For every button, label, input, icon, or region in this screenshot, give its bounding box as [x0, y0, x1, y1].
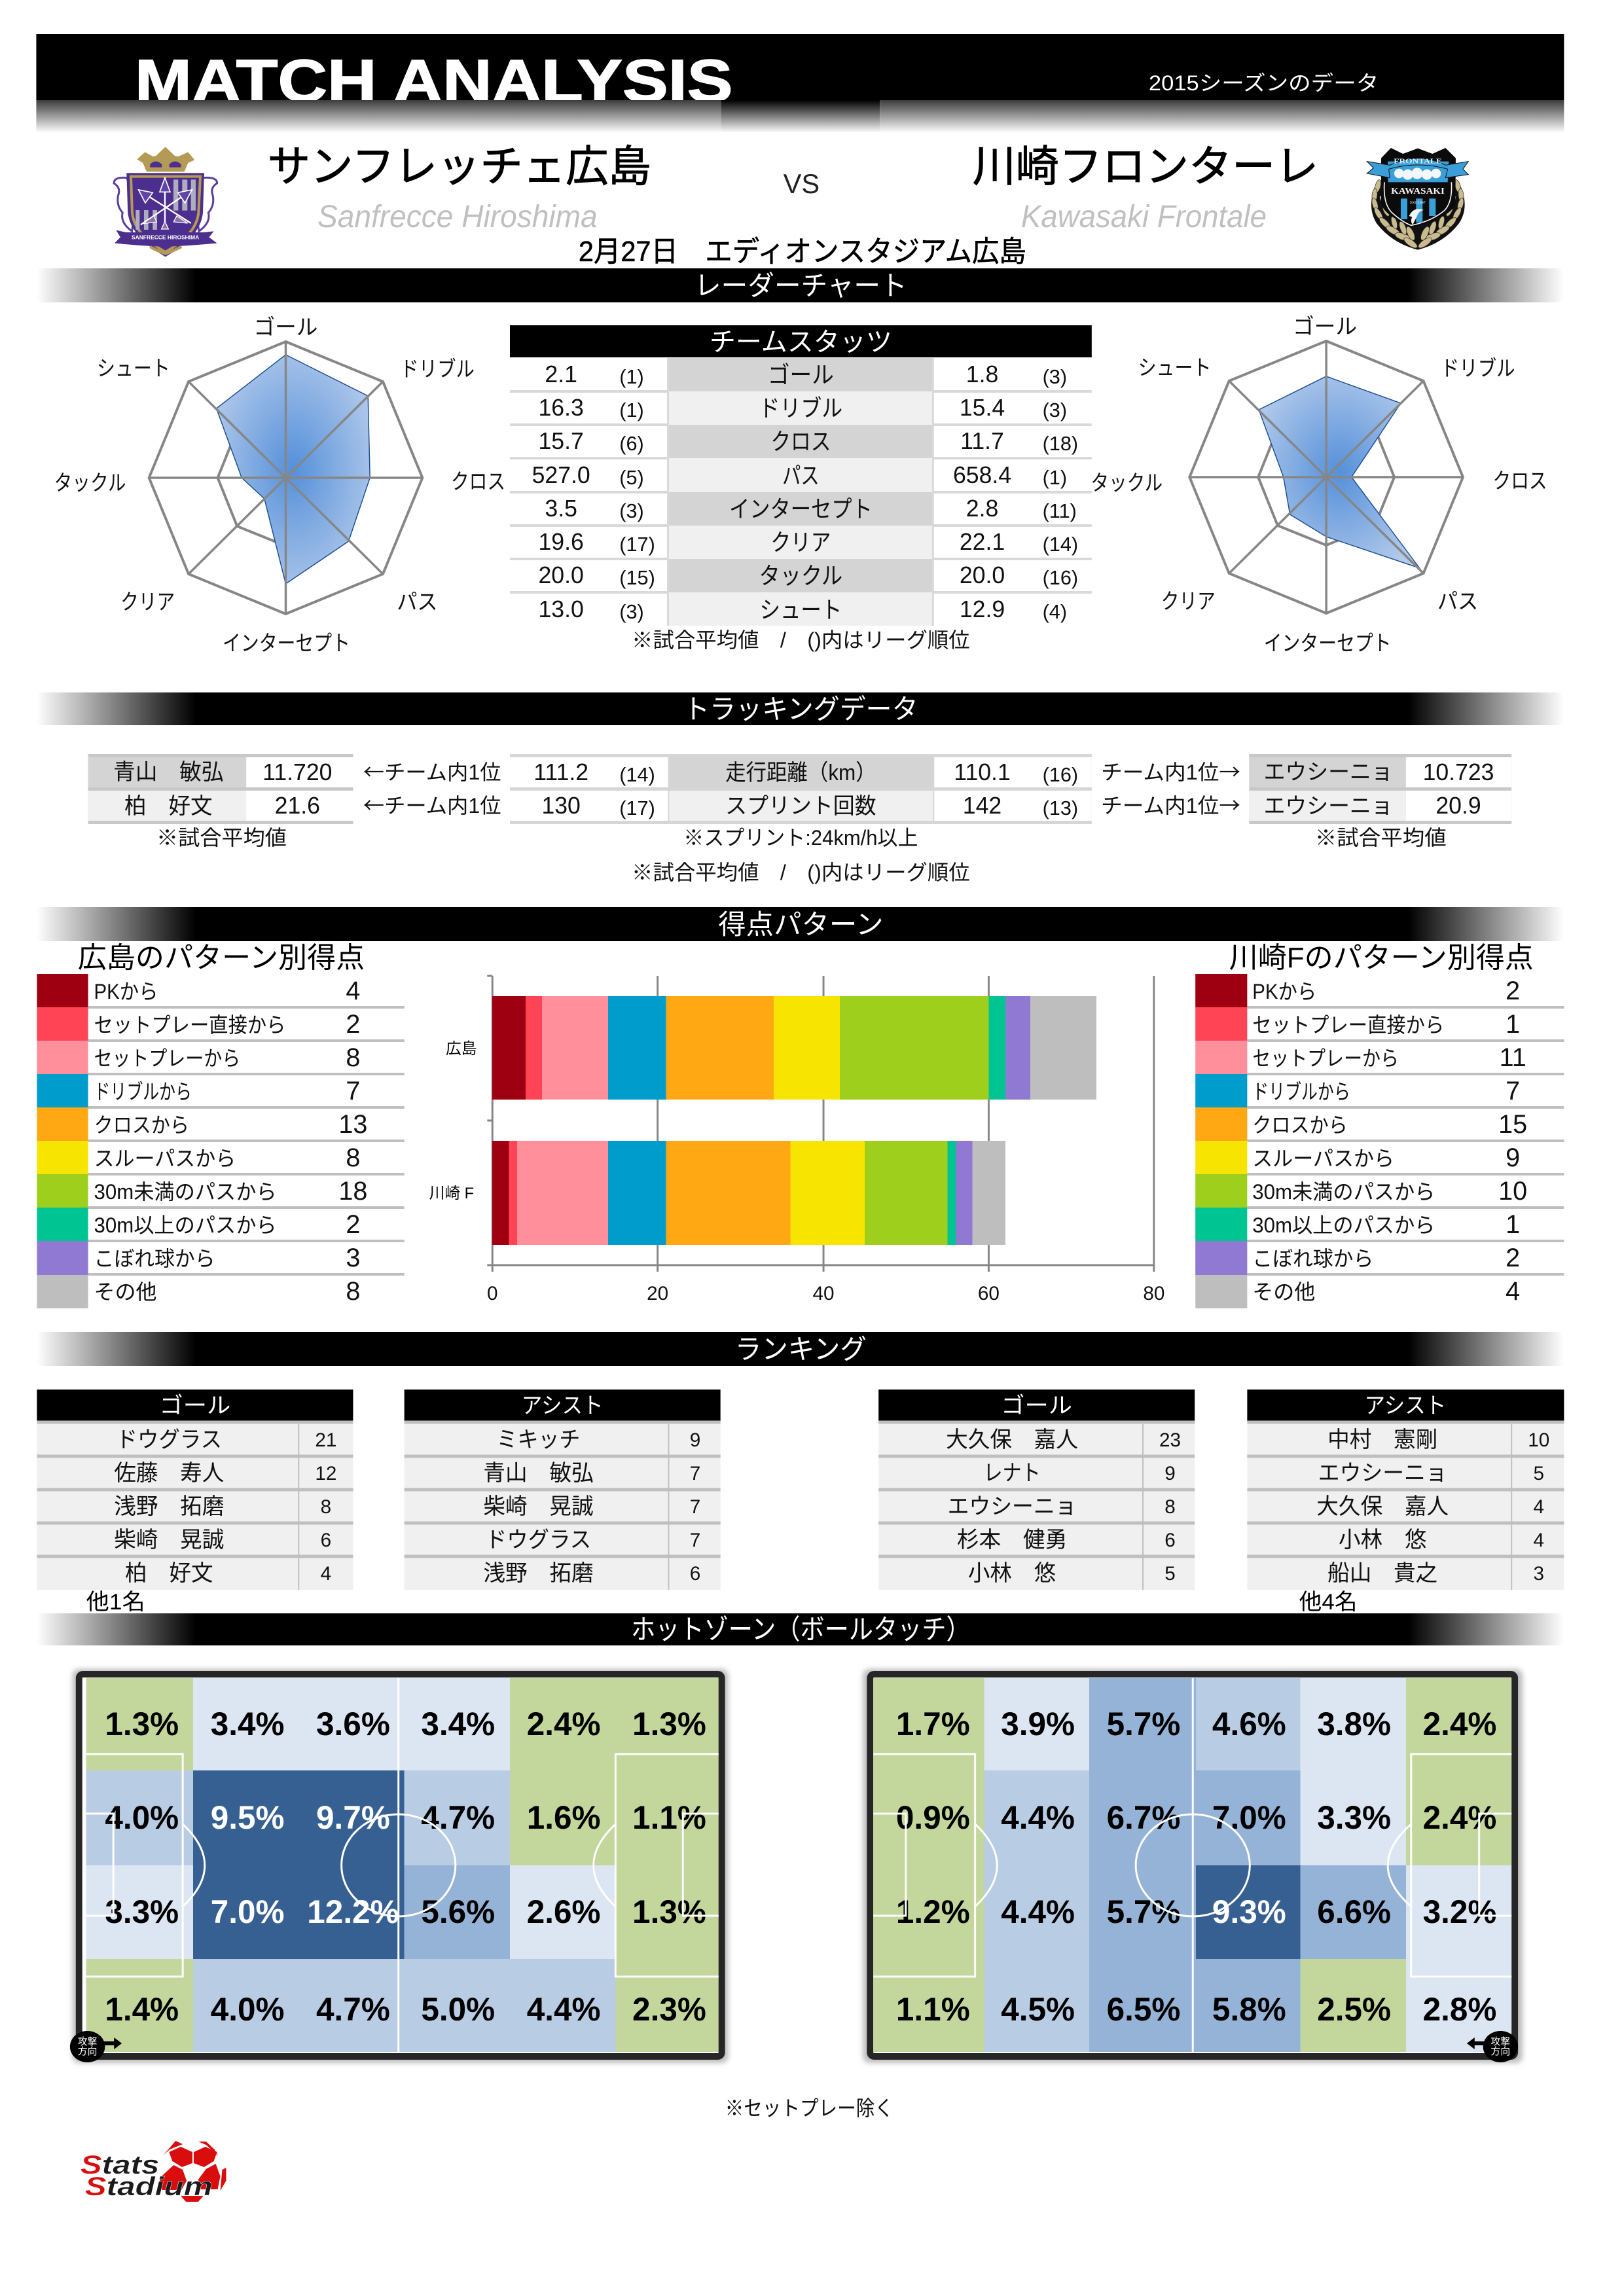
tracking: left arrows: ←チーム内1位 [363, 756, 501, 786]
stats rows: 20.0 [539, 562, 584, 588]
panel: Hiroshima scoring legend: セットプレーから [94, 1047, 240, 1070]
heat values: 5.0% [421, 1991, 495, 2028]
axis labels [54, 315, 505, 655]
data polygon [1259, 376, 1420, 568]
logo: Stats Stadium: Stats [81, 2151, 159, 2179]
panel: Kawasaki scoring legend: 10 [1498, 1177, 1527, 1206]
panel: Kawasaki scoring legend: 30m未満のパスから [1252, 1180, 1435, 1204]
team name: Sanfrecce [268, 143, 651, 234]
heat values: 4.6% [1212, 1706, 1286, 1742]
note: others Hiroshima: 他1名 [86, 1590, 145, 1615]
section heading: hot zone [36, 1613, 1564, 1645]
panel: Hiroshima goal ranking: ドウグラス [117, 1427, 222, 1452]
heat values: 3.4% [421, 1706, 495, 1742]
tracking: team comparison [510, 754, 1092, 824]
panel: Kawasaki scoring legend: 30m以上のパスから [1252, 1213, 1435, 1237]
stats rows: 12.9 [960, 596, 1005, 622]
panel: Hiroshima assist ranking: ドウグラス [486, 1528, 591, 1552]
stats rows: (1) [1043, 466, 1067, 489]
heat values: 3.3% [105, 1893, 179, 1930]
panel: Hiroshima assist ranking: 7 [690, 1496, 700, 1518]
section heading: ranking: ランキング [735, 1334, 867, 1365]
stacked bar chart: goals by pattern [429, 976, 1164, 1304]
panel: Hiroshima goal ranking: 浅野 拓磨 [114, 1494, 224, 1519]
section heading: scoring patterns [36, 907, 1564, 941]
heat values: 12.2% [307, 1893, 399, 1930]
icon: Kawasaki Frontale crest: FRONTALE [1394, 158, 1442, 166]
tracking: Hiroshima leaders: 柏 好文 [124, 794, 213, 819]
tracking: team comparison: (13) [1043, 797, 1078, 819]
heat values: 9.7% [316, 1799, 390, 1836]
heat values: 1.3% [632, 1706, 706, 1742]
axis labels [1091, 314, 1547, 655]
stats rows: 527.0 [532, 462, 590, 488]
tracking: Kawasaki leaders: エウシーニョ [1264, 794, 1393, 819]
stats rows: (1) [619, 365, 644, 388]
panel: Kawasaki scoring legend: 2 [1506, 977, 1520, 1005]
stats rows: (17) [619, 533, 655, 556]
logo: Stats Stadium [81, 2141, 226, 2202]
panel: Kawasaki scoring legend: クロスから [1252, 1113, 1348, 1137]
stats rows: 658.4 [953, 462, 1011, 488]
panel: Hiroshima scoring legend: こぼれ球から [94, 1247, 215, 1270]
chart axis labels: 0 [487, 1283, 498, 1304]
stats rows: 15.4 [960, 395, 1005, 421]
panel: Hiroshima assist ranking: アシスト [522, 1393, 604, 1418]
panel: Hiroshima scoring legend: 3 [346, 1244, 360, 1272]
heat values: 4.7% [316, 1991, 390, 2028]
heat values: 5.7% [1107, 1706, 1180, 1742]
panel: Hiroshima scoring legend: 2 [346, 1210, 360, 1239]
icon: red soccer ball [159, 2141, 226, 2202]
heat values: 2.4% [1423, 1706, 1496, 1742]
logo: Stats Stadium: Stadium [85, 2172, 213, 2201]
heat cells [86, 1678, 719, 2052]
panel: Kawasaki scoring legend: 11 [1500, 1043, 1526, 1072]
heat values: 2.6% [527, 1893, 601, 1930]
panel: Kawasaki scoring legend: セットプレー直接から [1252, 1013, 1444, 1037]
tracking: team comparison: 110.1 [954, 759, 1011, 785]
heat values: 1.1% [632, 1799, 706, 1836]
data polygon [217, 355, 370, 584]
axis labels: クロス [451, 469, 505, 493]
tracking: team comparison: 142 [963, 793, 1001, 819]
stats rows: ゴール [768, 362, 834, 388]
tracking footnotes: ※試合平均値 / ()内はリーグ順位 [632, 861, 970, 884]
heat values: 1.7% [896, 1706, 970, 1742]
panel: Kawasaki scoring legend: 1 [1506, 1010, 1520, 1039]
tracking: Kawasaki leaders: 10.723 [1423, 759, 1494, 785]
heat values: 0.9% [896, 1799, 970, 1836]
heat values: 3.3% [1317, 1799, 1391, 1836]
axis labels: インターセプト [223, 631, 350, 655]
stats rows: パス [782, 463, 820, 489]
tracking footnotes: ※スプリント:24km/h以上 [683, 826, 918, 850]
panel: Hiroshima assist ranking: 7 [690, 1530, 700, 1551]
heat values: 4.4% [527, 1991, 601, 2028]
legend heading: 川崎Fのパターン別得点 [1229, 942, 1534, 974]
stats rows: (16) [1043, 566, 1078, 589]
chart axis labels: 20 [647, 1283, 668, 1304]
panel: Kawasaki scoring legend: ドリブルから [1252, 1080, 1350, 1103]
panel: team stats table [510, 325, 1092, 652]
stats rows: インターセプト [729, 496, 873, 522]
axis labels: パス [397, 590, 438, 614]
axis labels: インターセプト [1264, 631, 1392, 655]
icon: Kawasaki Frontale crest [1367, 148, 1468, 250]
radar chart: Hiroshima [54, 315, 505, 655]
panel: Kawasaki scoring legend: 9 [1506, 1143, 1520, 1172]
footnote: set plays excluded: ※セットプレー除く [725, 2096, 893, 2120]
icon: Sanfrecce Hiroshima crest [114, 147, 217, 257]
heatmap pitch: Kawasaki [863, 1669, 1523, 2063]
panel: team stats table: チームスタッツ [710, 328, 892, 357]
match date and venue: 2月27日 エディオンスタジアム広島 [579, 236, 1026, 268]
heat values: 5.8% [1212, 1991, 1286, 2028]
bar: Kawasaki [492, 1141, 1005, 1245]
chart axis labels: 40 [813, 1283, 835, 1304]
panel: Hiroshima scoring legend: 13 [338, 1110, 367, 1139]
panel: Hiroshima assist ranking: 7 [690, 1463, 700, 1484]
tracking footnotes [156, 826, 1447, 884]
panel: Kawasaki assist ranking: 中村 憲剛 [1327, 1427, 1437, 1452]
panel: Kawasaki goal ranking: 5 [1164, 1563, 1176, 1585]
panel: Hiroshima scoring legend [37, 942, 405, 1308]
heat values: 9.3% [1212, 1893, 1286, 1930]
heat values: 3.4% [211, 1706, 284, 1742]
panel: Hiroshima scoring legend: ドリブルから [94, 1080, 192, 1103]
section heading: tracking data: トラッキングデータ [683, 694, 918, 725]
axis labels: タックル [1091, 471, 1163, 495]
axis labels: クリア [1161, 589, 1216, 613]
panel: Hiroshima scoring legend: 7 [346, 1077, 360, 1105]
panel: Hiroshima scoring legend: セットプレー直接から [94, 1013, 286, 1037]
axis labels: パス [1437, 589, 1478, 613]
stats rows: (1) [619, 399, 644, 422]
heat values: 5.6% [421, 1893, 495, 1930]
panel: Kawasaki goal ranking: 8 [1164, 1496, 1176, 1518]
heat values: 4.7% [421, 1799, 495, 1836]
icon: Kawasaki Frontale crest: KAWASAKI [1391, 187, 1445, 196]
stats rows: (3) [1043, 365, 1067, 388]
section heading: ranking [36, 1332, 1564, 1366]
icon: attack direction [70, 2031, 122, 2062]
panel: Hiroshima scoring legend: 18 [338, 1177, 367, 1206]
tracking footnotes: ※試合平均値 [156, 826, 287, 850]
axis labels: シュート [1138, 355, 1211, 380]
panel: Hiroshima goal ranking: 8 [321, 1496, 331, 1518]
panel: Kawasaki goal ranking: 小林 悠 [968, 1561, 1056, 1586]
panel: Hiroshima assist ranking [405, 1390, 721, 1590]
heat values: 2.3% [632, 1991, 706, 2028]
note: others Kawasaki: 他4名 [1299, 1590, 1358, 1615]
tracking: left arrows [363, 756, 501, 819]
tracking: Kawasaki leaders: 20.9 [1435, 793, 1481, 819]
stats rows: 1.8 [966, 361, 998, 387]
stats rows: 11.7 [960, 428, 1004, 454]
stats rows: 15.7 [539, 428, 584, 454]
panel: Hiroshima scoring legend: 8 [346, 1143, 360, 1172]
tracking: team comparison: (14) [619, 763, 655, 786]
panel: Hiroshima goal ranking: 12 [315, 1463, 336, 1484]
team name: Sanfrecce: サンフレッチェ広島 [268, 143, 651, 190]
heat values: 7.0% [1212, 1799, 1286, 1836]
tracking: Hiroshima leaders: 青山 敏弘 [113, 760, 223, 785]
tracking: Kawasaki leaders [1249, 754, 1511, 824]
stats footnote: ※試合平均値 / ()内はリーグ順位 [632, 628, 970, 652]
panel: Hiroshima scoring legend: 8 [346, 1277, 360, 1306]
section heading: tracking data [36, 692, 1564, 725]
panel: Kawasaki goal ranking: 23 [1159, 1429, 1181, 1451]
panel: Kawasaki goal ranking: ゴール [1001, 1393, 1072, 1418]
heat values: 3.2% [1423, 1893, 1496, 1930]
tracking: right arrows [1101, 756, 1240, 819]
tracking: right arrows: チーム内1位→ [1101, 789, 1240, 819]
heat values: 6.7% [1107, 1799, 1180, 1836]
panel: Kawasaki goal ranking: 大久保 嘉人 [946, 1427, 1078, 1452]
stats rows: 2.1 [545, 361, 577, 387]
panel: Kawasaki goal ranking: 6 [1164, 1530, 1176, 1551]
axis labels: タックル [54, 471, 126, 495]
tracking: team comparison: 走行距離（km） [725, 761, 876, 785]
stats rows: 22.1 [960, 529, 1005, 555]
panel: Kawasaki scoring legend: PKから [1252, 980, 1316, 1003]
panel: Hiroshima scoring legend: PKから [94, 980, 158, 1003]
panel: Hiroshima assist ranking: 9 [690, 1429, 700, 1451]
chart axis labels: 80 [1143, 1283, 1164, 1304]
tracking: Hiroshima leaders: 11.720 [262, 759, 332, 785]
tracking: Hiroshima leaders [88, 754, 353, 824]
panel: Kawasaki scoring legend: こぼれ球から [1252, 1247, 1373, 1270]
panel: Kawasaki assist ranking: エウシーニョ [1318, 1461, 1447, 1486]
panel: Hiroshima goal ranking [37, 1390, 353, 1590]
heat values: 3.8% [1317, 1706, 1391, 1742]
chart axis labels: 広島 [446, 1040, 477, 1058]
panel: Hiroshima scoring legend: 30m未満のパスから [94, 1180, 277, 1204]
icon: attack direction: 方向 [78, 2046, 97, 2057]
axis labels: クリア [120, 590, 175, 614]
heat values: 6.6% [1317, 1893, 1391, 1930]
panel: Kawasaki scoring legend: 15 [1498, 1110, 1527, 1139]
stats rows: タックル [759, 563, 842, 589]
heat cells [873, 1678, 1511, 2052]
axis labels: ドリブル [400, 357, 475, 381]
chart axis labels [429, 1040, 1164, 1304]
heat values: 2.4% [1423, 1799, 1496, 1836]
legend heading: 広島のパターン別得点 [78, 942, 365, 974]
panel: Kawasaki scoring legend: その他 [1252, 1280, 1315, 1304]
stats rows: 20.0 [960, 562, 1005, 588]
icon: attack direction: 攻撃 [1491, 2036, 1510, 2047]
panel: Kawasaki assist ranking: 3 [1534, 1563, 1544, 1585]
heat values: 4.0% [211, 1991, 284, 2028]
panel: Kawasaki scoring legend: 4 [1506, 1277, 1520, 1306]
vs: VS [784, 168, 820, 199]
panel: Kawasaki goal ranking [878, 1390, 1195, 1590]
panel: Kawasaki assist ranking: 10 [1528, 1429, 1549, 1451]
tracking: team comparison: (16) [1043, 763, 1078, 786]
chart axis labels: 川崎 F [429, 1185, 474, 1202]
panel: Hiroshima goal ranking: 柏 好文 [125, 1561, 213, 1586]
panel: Kawasaki assist ranking: 船山 貴之 [1327, 1561, 1437, 1586]
radar chart: Kawasaki [1091, 314, 1547, 655]
panel: Hiroshima scoring legend: その他 [94, 1280, 157, 1304]
heat values [896, 1706, 1496, 2028]
heat values: 1.4% [105, 1991, 179, 2028]
icon: Kawasaki Frontale crest: EST.1997 [1410, 202, 1426, 206]
title: MATCH ANALYSIS [135, 48, 732, 115]
team name: Kawasaki: 川崎フロンターレ [973, 143, 1318, 190]
heat values: 2.8% [1423, 1991, 1496, 2028]
panel: Hiroshima scoring legend: 8 [346, 1043, 360, 1072]
panel: tracking data tables [88, 754, 1511, 884]
stats rows: (6) [619, 432, 644, 455]
tracking: Kawasaki leaders: エウシーニョ [1264, 760, 1393, 785]
stats rows: (14) [1043, 533, 1078, 556]
heat values: 4.0% [105, 1799, 179, 1836]
tracking: Hiroshima leaders: 21.6 [275, 793, 320, 819]
panel: Kawasaki goal ranking: レナト [984, 1461, 1041, 1486]
heat values: 4.4% [1001, 1893, 1075, 1930]
stats rows: シュート [760, 597, 842, 623]
stats rows: (11) [1043, 499, 1077, 522]
axis labels: ゴール [254, 315, 317, 339]
panel: Kawasaki scoring legend: 7 [1506, 1077, 1520, 1105]
heat values: 5.7% [1107, 1893, 1180, 1930]
stats rows: (3) [619, 499, 644, 522]
tracking: right arrows: チーム内1位→ [1101, 756, 1240, 786]
heat values: 4.5% [1001, 1991, 1075, 2028]
icon: attack direction: 方向 [1491, 2046, 1510, 2057]
tracking: team comparison: 130 [541, 793, 581, 819]
heat values: 6.5% [1107, 1991, 1180, 2028]
chart axis labels: 60 [978, 1283, 1000, 1304]
header banner: 2015シーズンのデータ [1149, 71, 1379, 95]
panel: Hiroshima scoring legend: クロスから [94, 1113, 189, 1137]
panel: Hiroshima assist ranking: 浅野 拓磨 [483, 1561, 594, 1586]
axis labels: ドリブル [1441, 356, 1515, 380]
heat values: 1.6% [527, 1799, 601, 1836]
stats rows: (3) [619, 600, 644, 623]
stats rows: クロス [770, 429, 831, 455]
panel: Kawasaki scoring legend: 1 [1506, 1210, 1520, 1239]
stats rows [532, 361, 1078, 623]
team name: Kawasaki: Kawasaki Frontale [1021, 200, 1267, 234]
panel: Kawasaki scoring legend [1195, 942, 1564, 1308]
stats rows: (5) [619, 466, 644, 489]
panel: Kawasaki scoring legend: スルーパスから [1252, 1147, 1394, 1170]
heat values: 1.2% [896, 1893, 970, 1930]
heat values: 9.5% [211, 1799, 284, 1836]
heat values: 3.9% [1001, 1706, 1075, 1742]
stats rows: (3) [1043, 399, 1067, 422]
axis labels: ゴール [1293, 314, 1357, 338]
panel: Hiroshima assist ranking: ミキッチ [497, 1427, 580, 1452]
heat values: 7.0% [211, 1893, 284, 1930]
section heading: radar chart [36, 268, 1564, 302]
panel: Kawasaki assist ranking: 大久保 嘉人 [1316, 1494, 1449, 1519]
heat values: 3.6% [316, 1706, 390, 1742]
panel: Hiroshima scoring legend: 2 [346, 1010, 360, 1039]
stats rows: (18) [1043, 432, 1078, 455]
tracking: team comparison: スプリント回数 [725, 794, 876, 819]
icon: attack direction: 攻撃 [78, 2036, 98, 2047]
heat values: 1.3% [632, 1893, 706, 1930]
panel: Kawasaki assist ranking: 小林 悠 [1339, 1528, 1427, 1552]
icon: attack direction [1467, 2031, 1518, 2062]
heat values: 1.3% [105, 1706, 179, 1742]
section heading: hot zone: ホットゾーン（ボールタッチ） [631, 1614, 971, 1645]
panel: Kawasaki assist ranking: 4 [1534, 1496, 1544, 1518]
panel: Hiroshima goal ranking: ゴール [159, 1393, 230, 1418]
icon: Sanfrecce Hiroshima crest: SANFRECCE HIROSHIMA [132, 234, 200, 240]
stats rows: 13.0 [539, 596, 584, 622]
panel: Hiroshima goal ranking: 4 [321, 1563, 331, 1585]
stats rows: クリア [770, 529, 831, 556]
panel: Kawasaki scoring legend: 2 [1506, 1244, 1520, 1272]
team name: Sanfrecce: Sanfrecce Hiroshima [317, 200, 598, 234]
panel: Kawasaki assist ranking [1247, 1390, 1564, 1590]
panel: Hiroshima scoring legend: スルーパスから [94, 1147, 236, 1170]
stats rows: 3.5 [545, 495, 577, 522]
panel: Kawasaki scoring legend: セットプレーから [1252, 1047, 1399, 1070]
heat values: 4.4% [1001, 1799, 1075, 1836]
panel: Kawasaki assist ranking: 5 [1534, 1463, 1544, 1484]
header banner [36, 34, 1564, 133]
heat values: 2.4% [527, 1706, 601, 1742]
panel: Kawasaki goal ranking: 杉本 健勇 [957, 1528, 1067, 1552]
axis labels: シュート [97, 356, 170, 380]
tracking: team comparison: 111.2 [533, 759, 588, 785]
heat values [105, 1706, 706, 2028]
panel: Hiroshima goal ranking: 柴崎 晃誠 [114, 1528, 224, 1552]
heat values: 1.1% [896, 1991, 970, 2028]
section heading: scoring patterns: 得点パターン [718, 909, 884, 940]
bar: Hiroshima [492, 996, 1096, 1100]
panel: Kawasaki assist ranking: アシスト [1365, 1393, 1446, 1418]
section heading: radar chart: レーダーチャート [695, 270, 907, 301]
stats rows: (4) [1043, 600, 1067, 623]
panel: Hiroshima assist ranking: 青山 敏弘 [483, 1461, 594, 1486]
panel: Hiroshima scoring legend: 4 [346, 977, 360, 1005]
team name: Kawasaki [973, 143, 1318, 234]
axis labels: クロス [1492, 469, 1547, 493]
panel: Hiroshima assist ranking: 6 [690, 1563, 700, 1585]
tracking: team comparison: (17) [619, 797, 655, 819]
heat values: 2.5% [1317, 1991, 1391, 2028]
panel: Kawasaki goal ranking: 9 [1164, 1463, 1176, 1484]
panel: Hiroshima goal ranking: 21 [315, 1429, 336, 1451]
panel: Hiroshima goal ranking: 6 [321, 1530, 331, 1551]
stats rows: ドリブル [759, 395, 842, 422]
stats rows: 19.6 [539, 529, 584, 555]
tracking: left arrows: ←チーム内1位 [363, 789, 501, 819]
panel: Hiroshima goal ranking: 佐藤 寿人 [114, 1461, 224, 1486]
tracking footnotes: ※試合平均値 [1315, 826, 1447, 850]
panel: Kawasaki goal ranking: エウシーニョ [948, 1494, 1077, 1519]
heatmap pitch: Hiroshima [70, 1669, 729, 2063]
panel: Hiroshima assist ranking: 柴崎 晃誠 [483, 1494, 594, 1519]
panel: Hiroshima scoring legend: 30m以上のパスから [94, 1213, 277, 1237]
panel: Kawasaki assist ranking: 4 [1534, 1530, 1544, 1551]
stats rows: 16.3 [539, 395, 584, 421]
stats rows: 2.8 [966, 495, 998, 522]
stats rows: (15) [619, 566, 655, 589]
